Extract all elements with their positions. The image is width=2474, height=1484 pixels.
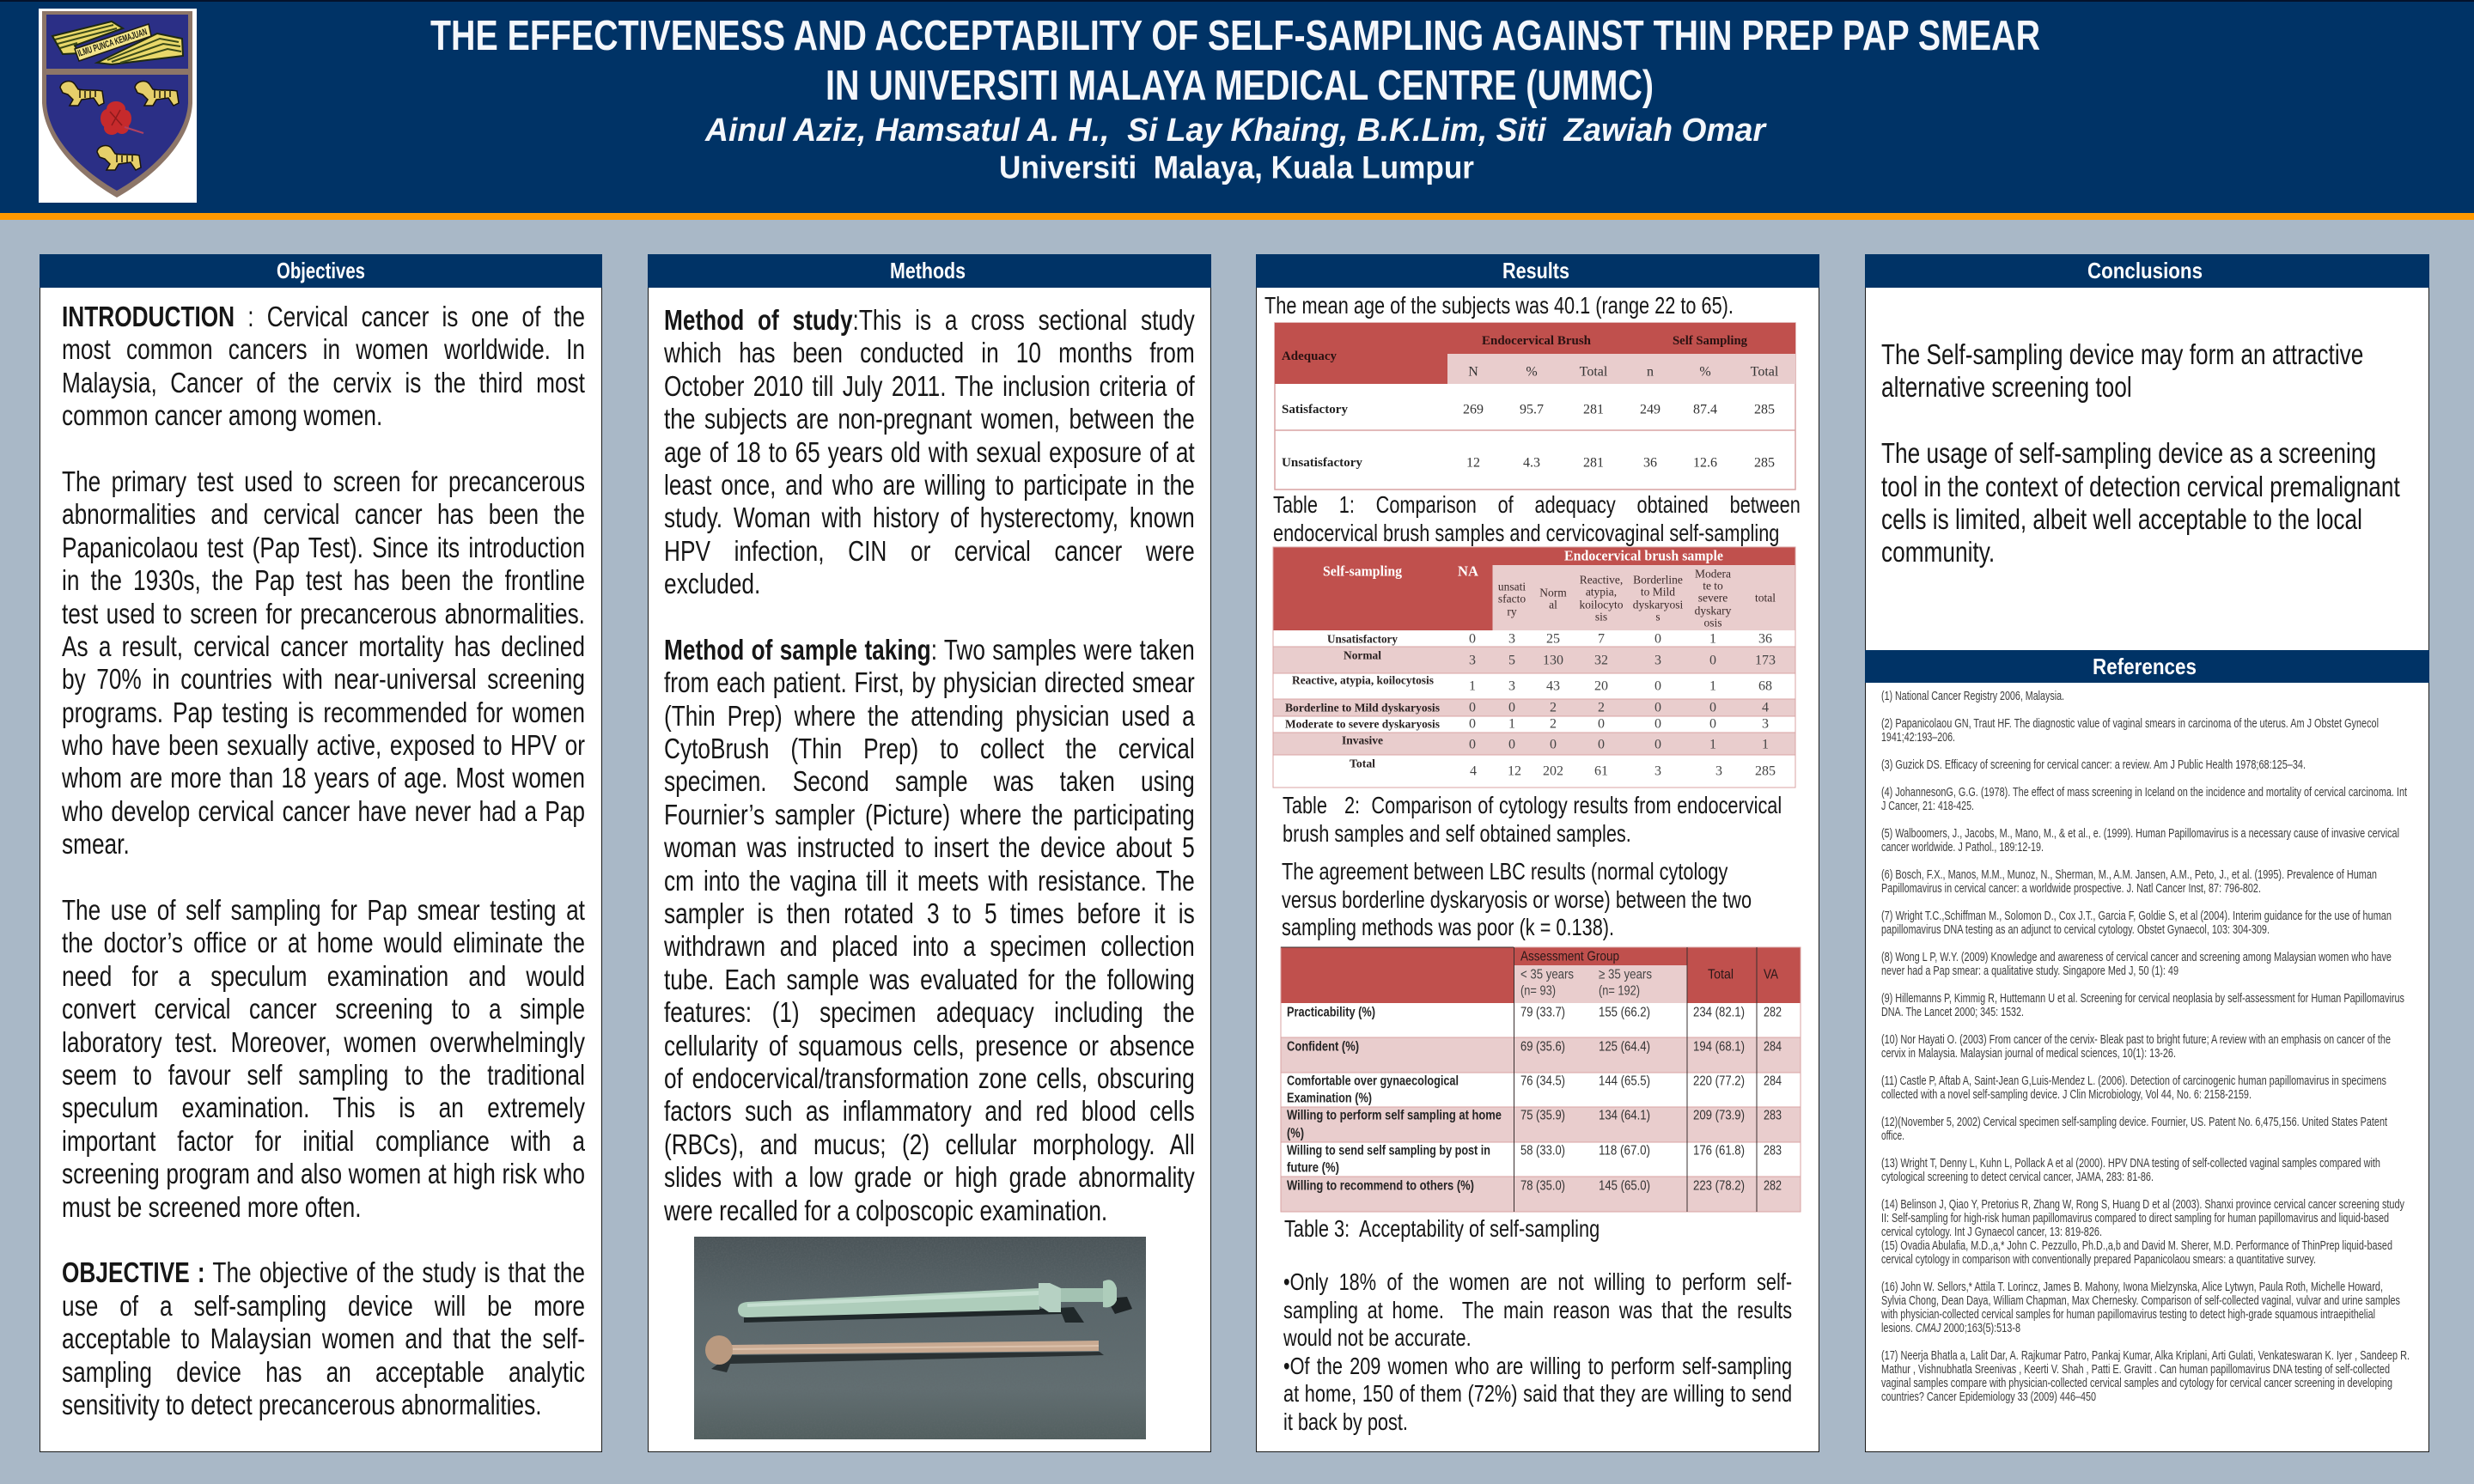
table 3: acceptability: Willing to recommend to others (%): [1287, 1178, 1474, 1194]
table 1: adequacy: 249: [1640, 402, 1661, 417]
table 3: acceptability: 78 (35.0): [1520, 1178, 1565, 1194]
reference list: lesions. CMAJ 2000;163(5):513-8: [1881, 1322, 2020, 1335]
table 3: acceptability: Examination (%): [1287, 1091, 1372, 1106]
text: method of study and sample taking: Method of study:This is a cross sectional study: [664, 304, 1195, 336]
table 2: cytology: 130: [1543, 653, 1563, 668]
table 2: cytology: unsati: [1498, 581, 1526, 593]
text: introduction and objective: who have been sexually active, exposed to HPV or: [62, 729, 585, 761]
text: method of study and sample taking: study. Woman with history of hysterectomy, known: [664, 502, 1195, 533]
table 2: cytology: 4: [1470, 764, 1477, 778]
table 3: acceptability: Total: [1708, 967, 1734, 982]
panel: conclusions: [1865, 254, 2429, 651]
panel: objectives: [40, 254, 602, 1452]
heading: objectives: Objectives: [277, 258, 365, 283]
text: introduction and objective: As a result, cervical cancer mortality has declined: [62, 630, 585, 662]
table 2: cytology: 1: [1709, 737, 1716, 752]
text: introduction and objective: test used to screen for precancerous abnormalities.: [62, 598, 585, 629]
text: method of study and sample taking: from each patient. First, by physician directed smear: [664, 666, 1195, 698]
table 2: cytology: 285: [1755, 764, 1776, 778]
table 3: acceptability: 283: [1764, 1108, 1782, 1123]
photo: self-sampling device: [694, 1237, 1146, 1439]
text: willingness findings: sampling at home. The main reason was that the results: [1283, 1297, 1792, 1323]
table 2: cytology: 0: [1709, 716, 1716, 732]
text: introduction and objective: OBJECTIVE : The objective of the study is that the: [62, 1256, 585, 1288]
table 2: cytology: osis: [1703, 617, 1722, 629]
text: introduction and objective: [62, 301, 585, 1420]
heading: references: [1865, 650, 2429, 683]
text: introduction and objective: smear.: [62, 828, 130, 860]
table 3: acceptability: Assessment Group: [1520, 950, 1619, 964]
reference list: countries? Cancer Epidemiology 33 (2009) 446–450: [1881, 1390, 2096, 1404]
table 1: adequacy: Satisfactory: [1282, 403, 1348, 417]
text: introduction and objective: programs. Pap testing is recommended for women: [62, 696, 585, 728]
text: introduction and objective: common cancer among women.: [62, 399, 382, 431]
text: introduction and objective: convert cervical cancer screening to a simple: [62, 993, 585, 1025]
table 2: cytology: 5: [1508, 653, 1515, 668]
table 3: acceptability: 209 (73.9): [1693, 1108, 1745, 1123]
table 1: adequacy: Total: [1751, 364, 1779, 380]
text: willingness findings: [1283, 1268, 1792, 1435]
text: introduction and objective: INTRODUCTION : Cervical cancer is one of the: [62, 301, 585, 332]
table 2: cytology: sfacto: [1498, 593, 1526, 605]
text: method of study and sample taking: the subjects are non-pregnant women, between the: [664, 403, 1195, 435]
reference list: cervical cytology. Int J Gynaecol cancer, 13: 819-826.: [1881, 1226, 2102, 1239]
table 2: cytology: sis: [1595, 610, 1607, 623]
table 1: adequacy: 269: [1463, 402, 1484, 417]
heading: objectives: [40, 254, 602, 288]
heading: results: [1256, 254, 1819, 288]
caption: table 1: Table 1: Comparison of adequacy obtained between: [1273, 491, 1801, 518]
text: method of study and sample taking: excluded.: [664, 568, 760, 599]
table 3: acceptability: 155 (66.2): [1599, 1005, 1650, 1020]
table 2: cytology: 0: [1508, 701, 1515, 715]
table 2: cytology: 3: [1508, 632, 1515, 646]
table 3: acceptability: 194 (68.1): [1693, 1039, 1745, 1055]
heading: results: Results: [1502, 258, 1569, 283]
books: [52, 21, 123, 54]
text: introduction and objective: who develop cervical cancer have never had a Pap: [62, 795, 585, 827]
table 3: acceptability: future (%): [1287, 1161, 1339, 1175]
table 1: adequacy: 4.3: [1523, 455, 1540, 471]
text: conclusions: The Self-sampling device may form an attractive: [1881, 338, 2363, 370]
reference list: collected with a novel self-sampling device. J Clin Microbiology, Vol 44, No. 6: 2158-2159.: [1881, 1088, 2252, 1102]
text: introduction and objective: acceptable to Malaysian women and that the self-: [62, 1323, 585, 1354]
reference list: J Cancer, 21: 418-425.: [1881, 800, 1974, 813]
table 2: cytology: 0: [1654, 701, 1661, 715]
table 3: acceptability: Comfortable over gynaecological: [1287, 1073, 1459, 1089]
logo: university shield: [39, 9, 197, 203]
text: willingness findings: •Only 18% of the women are not willing to perform self-: [1283, 1268, 1792, 1295]
table 2: cytology: 3: [1469, 653, 1476, 668]
text: agreement: The agreement between LBC results (normal cytology: [1282, 858, 1728, 885]
table 1: adequacy: %: [1526, 364, 1538, 380]
table 3: acceptability: 76 (34.5): [1520, 1073, 1565, 1089]
text: agreement: versus borderline dyskaryosis or worse) between the two: [1282, 886, 1752, 913]
reference list: Papillomavirus in cervical cancer: a worldwide prospective. J. Natl Cancer Inst, 87: 796-802.: [1881, 882, 2261, 896]
caption: table 2: brush samples and self obtained samples.: [1283, 820, 1631, 847]
text: method of study and sample taking: Fournier’s sampler (Picture) where the participating: [664, 799, 1195, 830]
table 2: cytology: 1: [1469, 678, 1476, 694]
text: introduction and objective: must be screened more often.: [62, 1191, 362, 1223]
text: introduction and objective: need for a speculum examination and would: [62, 960, 585, 992]
text: introduction and objective: screening program and also women at high risk who: [62, 1158, 585, 1189]
text: introduction and objective: by 70% in countries with near-universal screening: [62, 663, 585, 695]
table 3: acceptability: Practicability (%): [1287, 1005, 1375, 1020]
table 2: cytology: Normal: [1344, 649, 1381, 661]
heading: conclusions: [1865, 254, 2429, 288]
table 2: cytology: severe: [1698, 591, 1728, 605]
reference list: 1941;42:193–206.: [1881, 731, 1955, 745]
table 1: adequacy: %: [1699, 364, 1711, 380]
table 2: cytology: Reactive, atypia, koilocytosis: [1292, 673, 1434, 687]
table 2: cytology: 0: [1598, 737, 1605, 752]
table 2: cytology: total: [1755, 591, 1776, 605]
table 3: acceptability: 220 (77.2): [1693, 1073, 1745, 1089]
table 3: acceptability: [1280, 946, 1801, 1213]
table 3: acceptability: 223 (78.2): [1693, 1178, 1745, 1194]
caption: table 1: [1273, 491, 1801, 546]
table 3: acceptability: 284: [1764, 1039, 1782, 1055]
table 2: cytology: Modera: [1695, 567, 1731, 581]
table 2: cytology: Unsatisfactory: [1327, 632, 1398, 646]
table 2: cytology: 0: [1469, 737, 1476, 752]
table 1: adequacy: [1274, 322, 1796, 490]
reference list: office.: [1881, 1129, 1904, 1143]
text: method of study and sample taking: October 2010 till July 2011. The inclusion criteria of: [664, 370, 1195, 402]
table 2: cytology: s: [1655, 610, 1661, 623]
text: introduction and objective: Malaysia, Cancer of the cervix is the third most: [62, 367, 585, 398]
table 2: cytology: NA: [1458, 563, 1479, 579]
text: conclusions: community.: [1881, 536, 1995, 568]
text: conclusions: The usage of self-sampling device as a screening: [1881, 437, 2376, 469]
table 2: cytology: 3: [1508, 678, 1515, 694]
table 1: adequacy: 87.4: [1693, 402, 1717, 417]
table 1: adequacy: N: [1468, 364, 1478, 380]
table 2: cytology: Norm: [1539, 586, 1567, 599]
table 2: cytology: 36: [1758, 632, 1772, 646]
table 3: acceptability: VA: [1764, 967, 1778, 982]
table 2: cytology: 0: [1654, 737, 1661, 752]
table 3: acceptability: 58 (33.0): [1520, 1144, 1565, 1158]
table 2: cytology: 0: [1469, 632, 1476, 646]
panel: references: [1865, 650, 2429, 1452]
text: willingness findings: at home, 150 of them (72%) said that they are willing to send: [1283, 1380, 1792, 1407]
table 2: cytology: Reactive,: [1580, 574, 1623, 586]
hibiscus: [101, 101, 131, 135]
table 3: acceptability: 176 (61.8): [1693, 1144, 1745, 1158]
heading: methods: Methods: [890, 258, 966, 283]
table 3: acceptability: (n= 93): [1520, 984, 1556, 998]
text: introduction and objective: laboratory test. Moreover, women overwhelmingly: [62, 1026, 585, 1058]
text: introduction and objective: important factor for initial compliance with a: [62, 1125, 585, 1157]
text: conclusions: tool in the context of detection cervical premalignant: [1881, 471, 2400, 502]
text: method of study and sample taking: specimen. Second sample was taken using: [664, 765, 1195, 797]
text: introduction and objective: in the 1930s, the Pap test has been the frontline: [62, 564, 585, 596]
text: conclusions: cells is limited, albeit well acceptable to the local: [1881, 503, 2362, 535]
authors: Ainul Aziz, Hamsatul A. H., Si Lay Khaing, B.K.Lim, Siti Zawiah Omar: [704, 113, 1767, 149]
table 2: cytology: 0: [1508, 737, 1515, 752]
table 3: acceptability: 145 (65.0): [1599, 1178, 1650, 1194]
table 3: acceptability: 284: [1764, 1073, 1782, 1089]
table 3: acceptability: Willing to perform self sampling at home: [1287, 1108, 1502, 1123]
table 1: adequacy: Total: [1580, 364, 1608, 380]
table 2: cytology: 1: [1709, 678, 1716, 694]
table 2: cytology: dyskaryosi: [1633, 598, 1683, 611]
logo: university shield: ILMU PUNCA KEMAJUAN: [76, 27, 149, 59]
text: method of study and sample taking: withdrawn and placed into a specimen collection: [664, 930, 1195, 962]
panel: results: [1256, 254, 1819, 1452]
text: method of study and sample taking: least once, and who are willing to participate in the: [664, 469, 1195, 501]
table 2: cytology: 0: [1598, 716, 1605, 732]
table 3: acceptability: ≥ 35 years: [1599, 967, 1652, 982]
table 2: cytology: 0: [1550, 737, 1557, 752]
table 2: cytology: 0: [1469, 701, 1476, 715]
table 2: cytology: 68: [1758, 678, 1772, 694]
text: introduction and objective: use of a self-sampling device will be more: [62, 1290, 585, 1322]
text: method of study and sample taking: features: (1) specimen adequacy including the: [664, 996, 1195, 1028]
table 3: acceptability: 79 (33.7): [1520, 1005, 1565, 1020]
table 1: adequacy: Endocervical Brush: [1482, 334, 1592, 348]
text: agreement: [1282, 858, 1752, 940]
text: willingness findings: •Of the 209 women who are willing to perform self-sampling: [1283, 1353, 1792, 1379]
table 2: cytology: 25: [1546, 632, 1560, 646]
heading: references: References: [2093, 654, 2197, 679]
table 2: cytology: ry: [1507, 605, 1517, 618]
reference list: cancer worldwide. J Pathol., 189:12-19.: [1881, 841, 2044, 855]
text: mean age: The mean age of the subjects was 40.1 (range 22 to 65).: [1264, 292, 1734, 319]
table 1: adequacy: 281: [1583, 455, 1604, 471]
title and authors: [430, 13, 2040, 186]
reference list: never had a Pap smear: a qualitative study. Singapore Med J, 50 (1): 49: [1881, 964, 2178, 978]
table 3: acceptability: 283: [1764, 1144, 1782, 1158]
table 1: adequacy: 95.7: [1520, 402, 1544, 417]
text: method of study and sample taking: slides with a low grade or high grade abnormality: [664, 1161, 1195, 1193]
text: willingness findings: it back by post.: [1283, 1408, 1408, 1435]
table 1: adequacy: Self Sampling: [1673, 334, 1747, 348]
caption: table 2: [1283, 792, 1782, 847]
table 2: cytology: 3: [1762, 716, 1769, 732]
table 2: cytology: 0: [1709, 701, 1716, 715]
text: method of study and sample taking: HPV infection, CIN or cervical cancer were: [664, 535, 1195, 567]
table 2: cytology: 1: [1508, 716, 1515, 732]
table 2: cytology: 2: [1550, 701, 1557, 715]
text: introduction and objective: sampling device has an acceptable analytic: [62, 1355, 585, 1388]
table 2: cytology: koilocyto: [1579, 598, 1624, 611]
tigers: [60, 82, 104, 106]
table 2: cytology: 3: [1654, 764, 1661, 778]
table 1: adequacy: Unsatisfactory: [1282, 456, 1362, 470]
table 2: cytology: 3: [1654, 653, 1661, 668]
affiliation: Universiti Malaya, Kuala Lumpur: [999, 149, 1474, 186]
table 2: cytology: 32: [1594, 653, 1608, 668]
table 3: acceptability: 282: [1764, 1005, 1782, 1020]
text: method of study and sample taking: sampler is then rotated 3 to 5 times before it is: [664, 897, 1195, 929]
text: introduction and objective: whom are more than 18 years of age. Most women: [62, 762, 585, 794]
text: method of study and sample taking: Method of sample taking: Two samples were taken: [664, 634, 1195, 666]
table 2: cytology: 0: [1654, 716, 1661, 732]
text: introduction and objective: Papanicolaou test (Pap Test). Since its introduction: [62, 532, 585, 563]
table 1: adequacy: 285: [1754, 455, 1775, 471]
reference list: DNA. The Lancet 2000; 345: 1532.: [1881, 1006, 2024, 1019]
table 2: cytology: 4: [1762, 701, 1769, 715]
table 1: adequacy: 281: [1583, 402, 1604, 417]
text: introduction and objective: The primary test used to screen for precancerous: [62, 465, 585, 497]
table 3: acceptability: 144 (65.5): [1599, 1073, 1650, 1089]
table 2: cytology: Borderline: [1633, 574, 1683, 586]
table 2: cytology: Total: [1350, 757, 1375, 769]
title line 2: IN UNIVERSITI MALAYA MEDICAL CENTRE (UMMC): [826, 63, 1654, 109]
table 3: acceptability: Confident (%): [1287, 1039, 1359, 1055]
table 2: cytology: 7: [1598, 632, 1605, 646]
reference list: cervix in Malaysia. Malaysian journal of medical sciences, 10(1): 13-26.: [1881, 1047, 2176, 1061]
text: method of study and sample taking: [664, 304, 1195, 1226]
table 2: cytology: atypia,: [1586, 586, 1617, 598]
table 2: cytology: 0: [1654, 632, 1661, 646]
text: conclusions: alternative screening tool: [1881, 371, 2132, 403]
text: introduction and objective: abnormalities and cervical cancer has been the: [62, 498, 585, 530]
table 3: acceptability: 75 (35.9): [1520, 1108, 1565, 1123]
text: method of study and sample taking: cellularity of squamous cells, presence or absence: [664, 1030, 1195, 1061]
text: method of study and sample taking: (Thin Prep) where the attending physician used a: [664, 700, 1195, 732]
table 2: cytology: 1: [1709, 632, 1716, 646]
table 2: cytology: dyskary: [1695, 605, 1732, 617]
table 3: acceptability: 118 (67.0): [1599, 1144, 1650, 1158]
text: introduction and objective: seem to favour self sampling to the traditional: [62, 1059, 585, 1091]
heading: methods: [648, 254, 1211, 288]
heading: conclusions: Conclusions: [2087, 258, 2203, 283]
table 1: adequacy: Adequacy: [1282, 350, 1337, 363]
table 2: cytology: 3: [1715, 764, 1722, 778]
text: introduction and objective: The use of self sampling for Pap smear testing at: [62, 894, 585, 926]
table 3: acceptability: (%): [1287, 1127, 1304, 1140]
table 1: adequacy: n: [1647, 364, 1654, 380]
text: conclusions: [1881, 338, 2400, 568]
table 2: cytology: 173: [1755, 653, 1776, 668]
table 2: cytology: [1273, 546, 1795, 788]
reference list: papillomavirus DNA testing as an adjunct to cervical cytology. Obstet Gynaecol, 103: 304-309.: [1881, 923, 2270, 937]
table 3: acceptability: Willing to send self sampling by post in: [1287, 1144, 1490, 1158]
table 2: cytology: Invasive: [1342, 733, 1383, 747]
table 3: acceptability: 234 (82.1): [1693, 1005, 1745, 1020]
text: method of study and sample taking: age of 18 to 65 years old with sexual exposure of at: [664, 436, 1195, 468]
table 2: cytology: 12: [1508, 764, 1521, 778]
text: method of study and sample taking: tube. Each sample was evaluated for the following: [664, 964, 1195, 995]
table 1: adequacy: 36: [1643, 455, 1657, 471]
panel: methods: [648, 254, 1211, 1452]
table 2: cytology: Moderate to severe dyskaryosis: [1285, 718, 1440, 730]
table 2: cytology: 43: [1546, 678, 1560, 694]
text: method of study and sample taking: which has been conducted in 10 months from: [664, 337, 1195, 368]
table 3: acceptability: (n= 192): [1599, 984, 1640, 998]
table 3: acceptability: 69 (35.6): [1520, 1039, 1565, 1055]
text: method of study and sample taking: factors such as inflammatory and red blood cells: [664, 1095, 1195, 1127]
table 2: cytology: 2: [1598, 701, 1605, 715]
text: agreement: sampling methods was poor (k = 0.138).: [1282, 914, 1614, 940]
table 2: cytology: 0: [1654, 678, 1661, 694]
caption: table 2: Table 2: Comparison of cytology results from endocervical: [1283, 792, 1782, 818]
table 1: adequacy: 285: [1754, 402, 1775, 417]
text: introduction and objective: speculum examination. This is an extremely: [62, 1092, 585, 1123]
text: method of study and sample taking: cm into the vagina till it meets with resistance. The: [664, 865, 1195, 897]
reference list: (1) National Cancer Registry 2006, Malaysia.: [1881, 690, 2064, 703]
text: introduction and objective: sensitivity to detect precancerous abnormalities.: [62, 1389, 541, 1420]
table 2: cytology: 0: [1709, 653, 1716, 668]
table 2: cytology: 2: [1550, 716, 1557, 732]
reference list: cytological screening to detect cervical cancer, JAMA, 283: 81-86.: [1881, 1171, 2154, 1184]
table 2: cytology: Borderline to Mild dyskaryosis: [1285, 701, 1440, 715]
text: willingness findings: would not be accurate.: [1283, 1324, 1472, 1351]
text: method of study and sample taking: CytoBrush (Thin Prep) to collect the cervical: [664, 733, 1195, 764]
text: method of study and sample taking: (RBCs), and mucus; (2) cellular morphology. All: [664, 1128, 1195, 1160]
table 3: acceptability: 134 (64.1): [1599, 1108, 1650, 1123]
text: method of study and sample taking: were recalled for a colposcopic examination.: [664, 1195, 1107, 1226]
text: method of study and sample taking: woman was instructed to insert the device about 5: [664, 831, 1195, 863]
table 2: cytology: te to: [1703, 579, 1723, 593]
table 3: acceptability: 282: [1764, 1178, 1782, 1194]
caption: table 1: endocervical brush samples and cervicovaginal self-sampling: [1273, 520, 1779, 546]
table 2: cytology: al: [1549, 598, 1557, 611]
table 2: cytology: 61: [1594, 764, 1608, 778]
caption: table 3: Table 3: Acceptability of self-sampling: [1284, 1215, 1600, 1242]
table 2: cytology: 20: [1594, 678, 1608, 694]
text: method of study and sample taking: of endocervical/transformation zone cells, obscuring: [664, 1062, 1195, 1094]
table 2: cytology: Endocervical brush sample: [1564, 548, 1723, 563]
table 3: acceptability: < 35 years: [1520, 967, 1574, 982]
table 2: cytology: 202: [1543, 764, 1563, 778]
table 2: cytology: 0: [1469, 716, 1476, 732]
table 3: acceptability: 125 (64.4): [1599, 1039, 1650, 1055]
text: introduction and objective: the doctor’s office or at home would eliminate the: [62, 927, 585, 958]
text: introduction and objective: most common cancers in women worldwide. In: [62, 333, 585, 365]
reference list: [1881, 690, 2410, 1404]
header banner: [0, 0, 2474, 220]
table 1: adequacy: 12.6: [1693, 455, 1717, 471]
table 1: adequacy: 12: [1466, 455, 1480, 471]
table 2: cytology: 1: [1762, 737, 1769, 752]
table 2: cytology: to Mild: [1641, 586, 1675, 598]
table 2: cytology: Self-sampling: [1323, 563, 1402, 579]
